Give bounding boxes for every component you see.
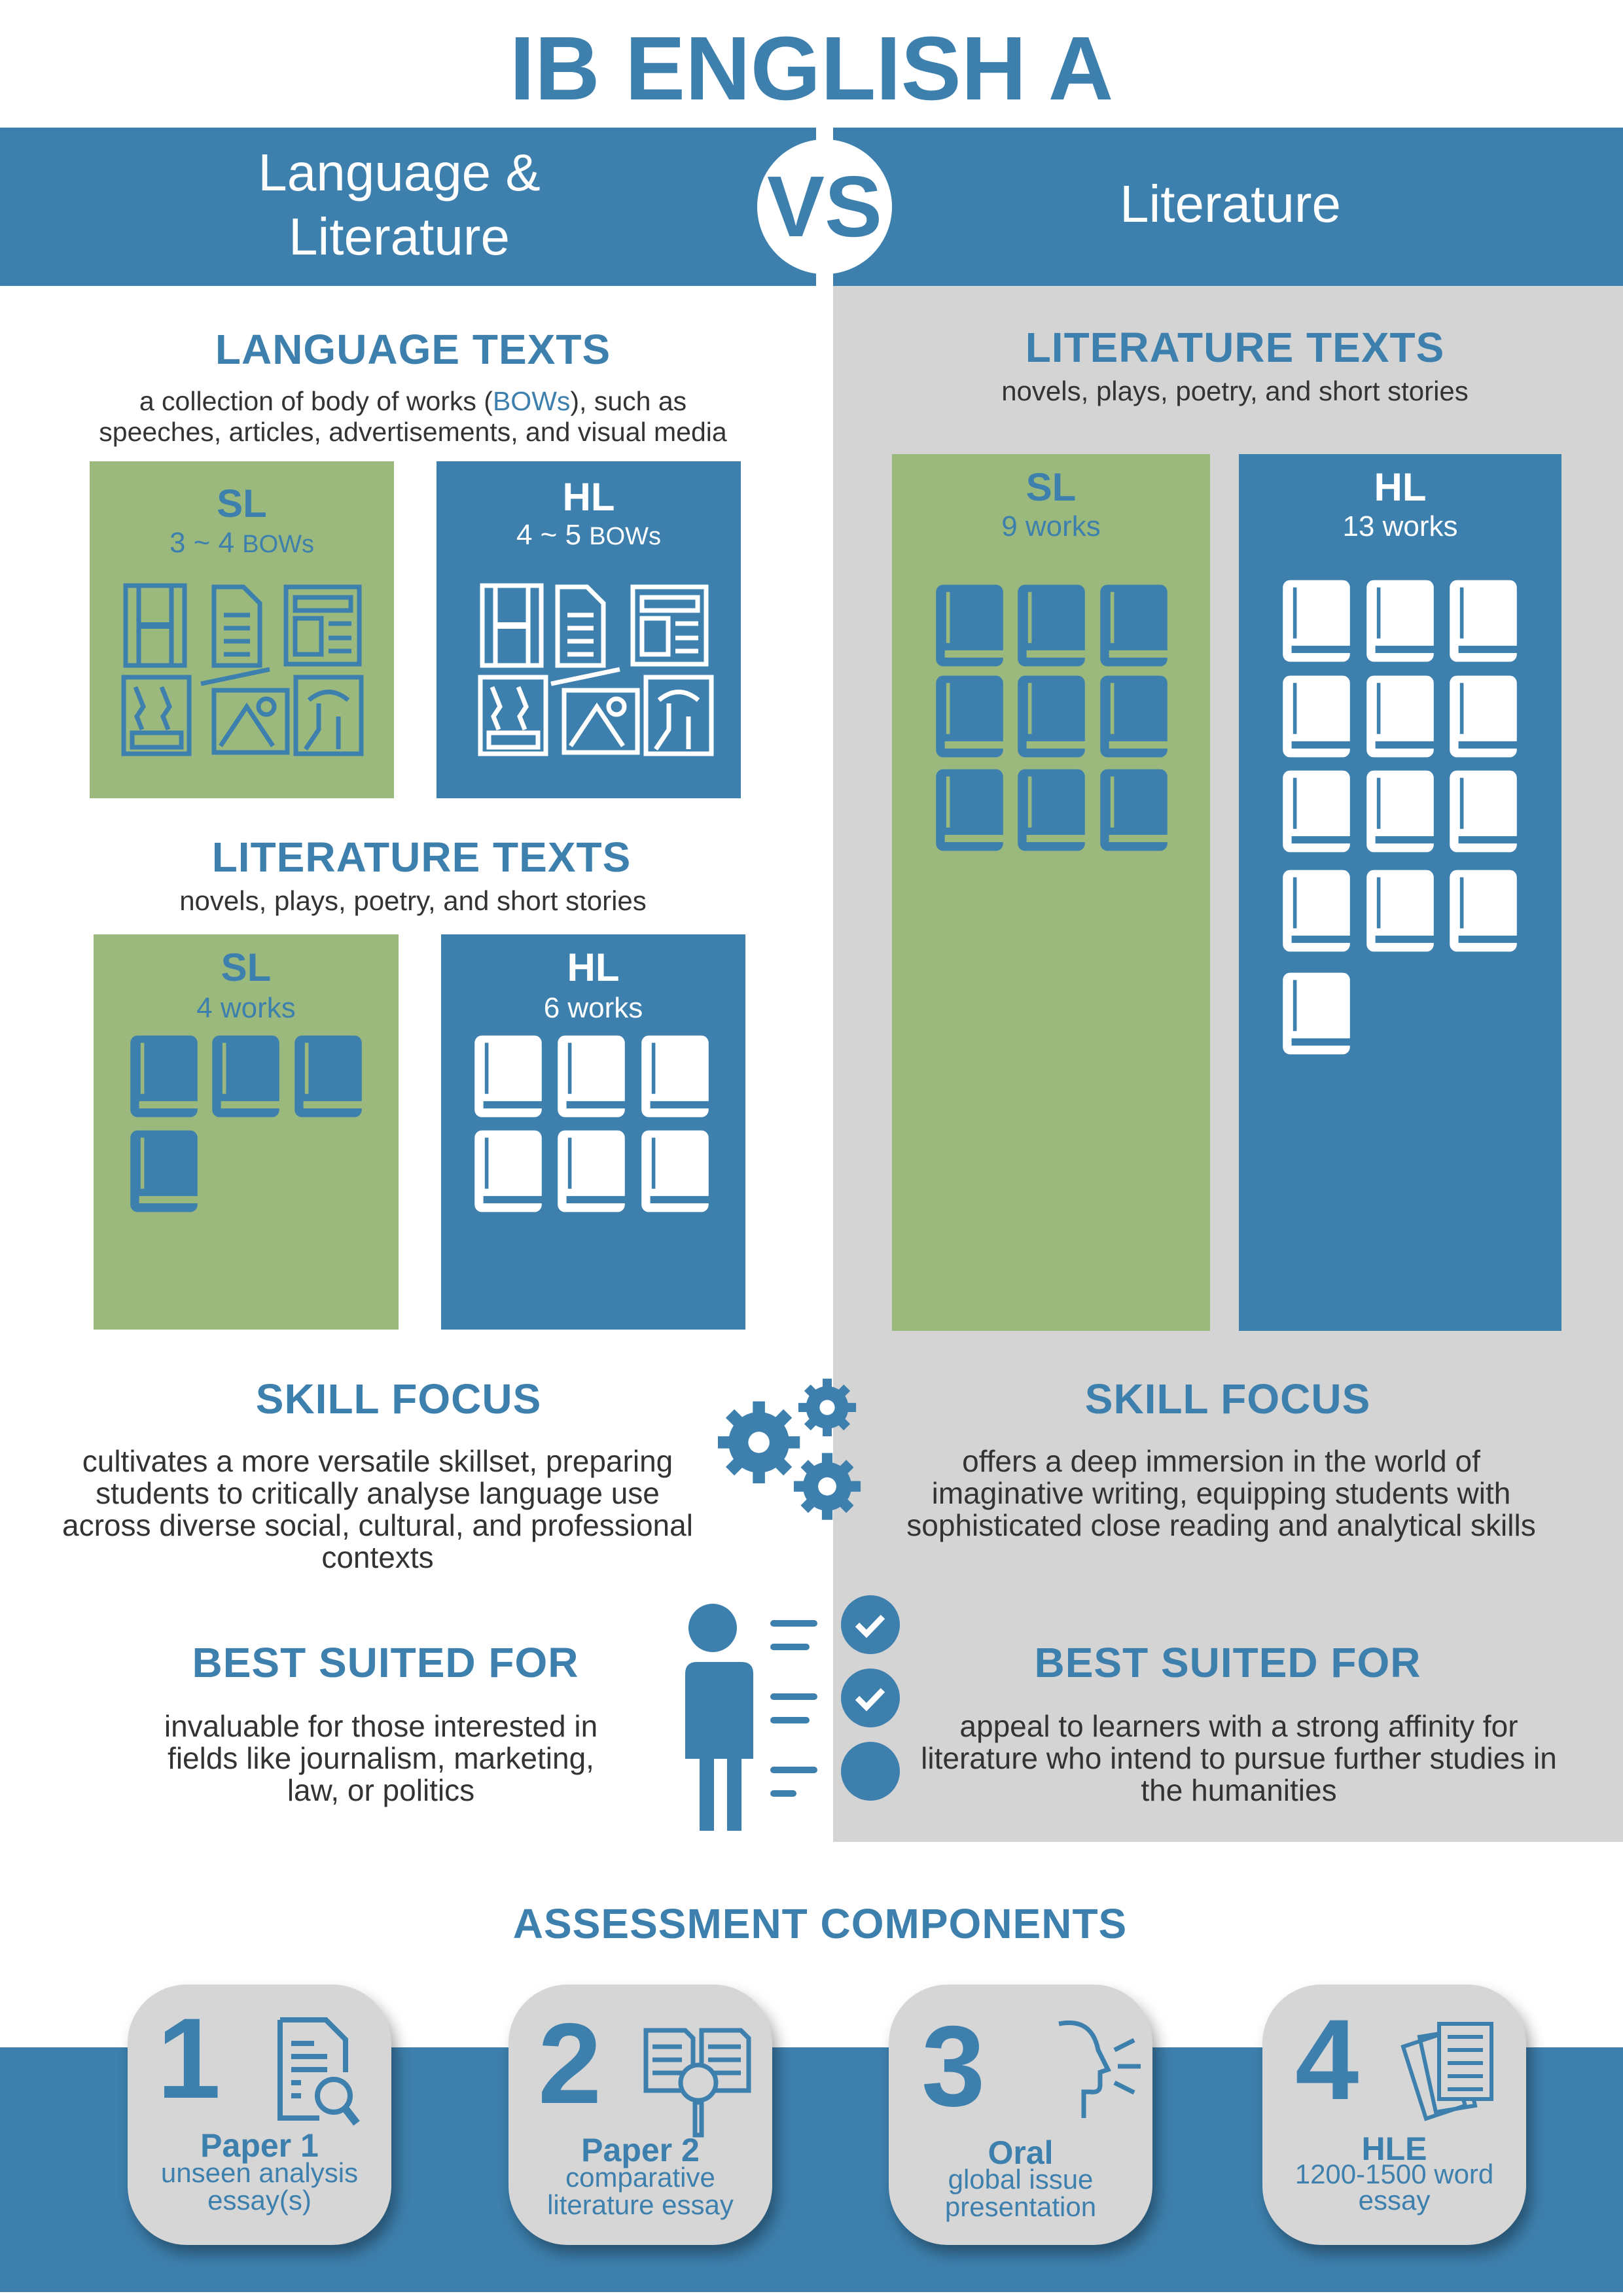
text: language texts description: speeches, articles, advertisements, and visual media <box>99 417 727 447</box>
text: language texts description: a collection of body of works (BOWs), such as <box>139 386 687 416</box>
text: skill focus (right) <box>906 1444 1536 1542</box>
panel: language HL: HL <box>563 475 615 519</box>
panel: literature HL (right) <box>1239 454 1561 1331</box>
panel: literature SL (left) <box>94 934 399 1330</box>
card: paper 1: 1 <box>157 1995 221 2123</box>
VS badge: VS <box>767 158 882 255</box>
card: paper 2: 2 <box>538 2000 601 2128</box>
panel: literature SL (left): 4 works <box>196 992 296 1024</box>
right gray panel <box>833 286 1623 1842</box>
card: HLE: essay <box>1359 2185 1430 2216</box>
text: best suited (left): law, or politics <box>287 1773 474 1807</box>
header: language & literature: Literature <box>289 207 510 266</box>
icons: media <box>122 584 364 756</box>
text: language texts description <box>99 386 727 447</box>
panel: language HL <box>437 461 741 798</box>
text: skill focus (left): contexts <box>321 1540 434 1574</box>
text: skill focus (left): cultivates a more versatile skillset, preparing <box>82 1444 673 1478</box>
text: literature description (left): novels, plays, poetry, and short stories <box>179 885 647 916</box>
panel: literature SL (right): 9 works <box>1001 510 1101 542</box>
icons: media <box>478 584 713 756</box>
card: oral: global issue <box>948 2164 1093 2195</box>
card: HLE: HLE <box>1361 2130 1427 2167</box>
header: language & literature: Language & <box>258 143 541 202</box>
panel: literature HL (left) <box>441 934 745 1330</box>
card: HLE: 1200-1500 word <box>1295 2159 1493 2189</box>
heading: skill focus (left): SKILL FOCUS <box>256 1375 541 1422</box>
header: literature: Literature <box>1120 175 1341 233</box>
text: best suited (right) <box>921 1709 1557 1807</box>
text: skill focus (right): offers a deep immersion in the world of <box>962 1444 1480 1478</box>
heading: assessment components: ASSESSMENT COMPONENTS <box>513 1900 1127 1947</box>
books <box>474 1035 709 1212</box>
heading: literature texts (right): LITERATURE TEXTS <box>1026 324 1444 371</box>
heading: skill focus (right): SKILL FOCUS <box>1085 1375 1370 1422</box>
card: oral: presentation <box>945 2191 1096 2222</box>
icon: speaking head <box>1058 2021 1141 2118</box>
books <box>936 585 1168 851</box>
title: IB ENGLISH A <box>510 18 1113 119</box>
text: best suited (right): literature who intend to pursue further studies in <box>921 1741 1557 1775</box>
header band <box>0 128 1623 286</box>
card: oral <box>889 1985 1152 2245</box>
text: skill focus (right): sophisticated close reading and analytical skills <box>906 1508 1536 1542</box>
panel: literature HL (left): 6 works <box>544 992 643 1024</box>
blue footer band <box>0 2047 1623 2292</box>
text: skill focus (left): across diverse social, cultural, and professional <box>62 1508 693 1542</box>
text: skill focus (left) <box>62 1444 693 1574</box>
panel: literature SL (right) <box>892 454 1210 1331</box>
icon: open pages with magnifier <box>644 2028 751 2137</box>
panel: literature HL (right): 13 works <box>1342 510 1458 542</box>
card: HLE <box>1262 1985 1526 2245</box>
card: paper 1: Paper 1 <box>200 2127 319 2164</box>
card: oral: Oral <box>988 2134 1054 2171</box>
panel: language SL: 3 ~ 4 BOWs <box>169 527 314 559</box>
icon: document with magnifier <box>277 2017 360 2126</box>
icon: person with checklist <box>685 1595 900 1831</box>
panel: language SL: SL <box>217 482 267 525</box>
heading: best suited for (right): BEST SUITED FOR <box>1034 1639 1421 1686</box>
card: paper 1: unseen analysis <box>161 2157 358 2188</box>
text: best suited (left) <box>164 1709 597 1807</box>
VS badge <box>757 139 892 274</box>
text: literature description (right): novels, plays, poetry, and short stories <box>1001 376 1469 406</box>
panel: literature HL (right): HL <box>1374 465 1426 509</box>
panel: language SL <box>90 461 394 798</box>
text: skill focus (left): students to critically analyse language use <box>96 1476 660 1510</box>
card: paper 1 <box>128 1985 391 2245</box>
card: paper 2 <box>508 1985 772 2245</box>
heading: language texts: LANGUAGE TEXTS <box>215 326 611 373</box>
card: paper 2: comparative <box>565 2162 715 2193</box>
header: language & literature <box>258 143 541 266</box>
panel: literature SL (left): SL <box>221 945 271 989</box>
card: paper 2: Paper 2 <box>581 2132 700 2168</box>
text: best suited (left): fields like journalism, marketing, <box>168 1741 594 1775</box>
text: best suited (right): appeal to learners with a strong affinity for <box>959 1709 1518 1743</box>
icon: stacked documents <box>1400 2022 1493 2121</box>
panel: literature HL (left): HL <box>567 945 619 989</box>
card: paper 2: literature essay <box>547 2189 734 2220</box>
heading: literature texts (left): LITERATURE TEXTS <box>212 834 631 881</box>
card: paper 1: essay(s) <box>207 2185 312 2216</box>
books <box>130 1035 362 1212</box>
card: oral: 3 <box>921 2003 985 2130</box>
text: best suited (left): invaluable for those interested in <box>164 1709 597 1743</box>
panel: literature SL (right): SL <box>1026 465 1076 509</box>
text: best suited (right): the humanities <box>1141 1773 1337 1807</box>
text: skill focus (right): imaginative writing, equipping students with <box>932 1476 1510 1510</box>
card: HLE: 4 <box>1295 1996 1359 2124</box>
panel: language HL: 4 ~ 5 BOWs <box>516 519 661 551</box>
icon: gears <box>717 1379 861 1520</box>
heading: best suited for (left): BEST SUITED FOR <box>192 1639 579 1686</box>
books <box>1283 580 1517 1055</box>
